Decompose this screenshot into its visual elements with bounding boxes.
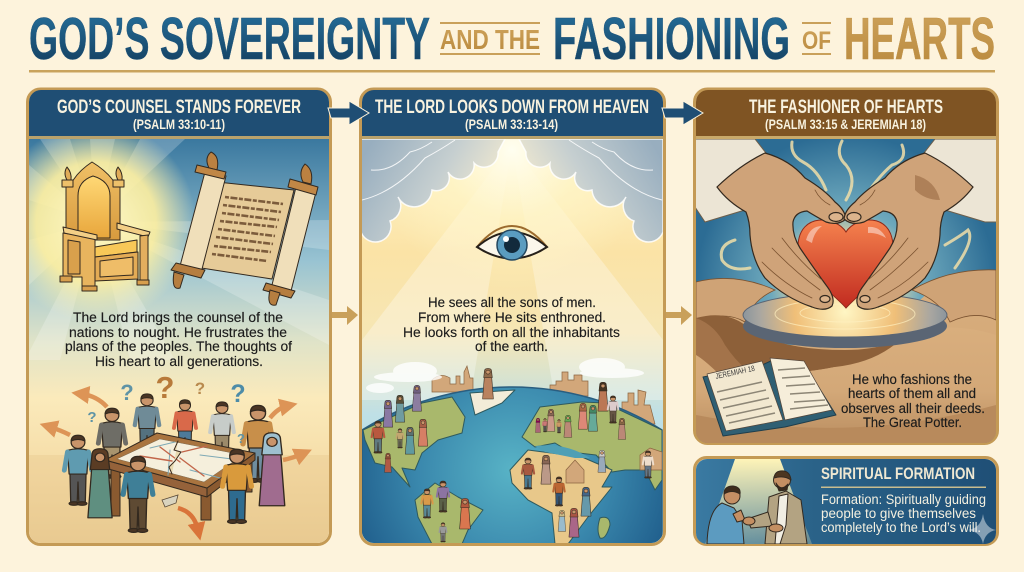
panel 4 heading: SPIRITUAL FORMATION (821, 464, 975, 483)
panel 2 text: He sees all the sons of men. (428, 295, 596, 310)
panel 2 text: He looks forth on all the inhabitants (403, 325, 620, 340)
light beam (705, 459, 812, 544)
arrow: gold arrow one (332, 306, 358, 325)
panel 1 text: nations to nought. He frustrates the (69, 325, 287, 340)
icon: golden throne (60, 162, 150, 291)
panel 4 text (821, 492, 986, 535)
skyline cities (432, 366, 655, 424)
kneeling figure praying (707, 486, 745, 544)
arrow: blue header arrow two (662, 101, 703, 125)
people of the earth (372, 368, 653, 542)
sleeves (695, 139, 997, 222)
back row of people (64, 394, 273, 505)
panel 1 text: His heart to all generations. (95, 354, 263, 369)
white clouds (366, 358, 644, 393)
panel 1 text: plans of the peoples. The thoughts of (65, 339, 292, 354)
scattered confused arrows (50, 394, 302, 530)
panel 1 header (29, 90, 329, 139)
globe (362, 387, 662, 544)
icon: potter's hands (717, 153, 973, 309)
panel 3 header: (PSALM 33:15 & JEREMIAH 18) (765, 116, 926, 132)
title: GOD’S SOVEREIGNTY (29, 6, 430, 72)
title (29, 6, 995, 72)
arrow: gold arrow two (666, 306, 692, 325)
panel 3 text: He who fashions the (852, 372, 972, 387)
panel 2 illustration (362, 139, 663, 543)
panel 1 text: The Lord brings the counsel of the (73, 310, 283, 325)
title: OF (802, 27, 831, 55)
panel: spiritual formation (694, 458, 998, 544)
panel 4 text: completely to the Lord’s will. (821, 520, 981, 535)
panel 1 header: (PSALM 33:10-11) (133, 116, 225, 132)
question marks: ? (156, 370, 174, 405)
question marks: ? (230, 380, 246, 408)
panel 3 text (841, 372, 985, 430)
panel 4 text: Formation: Spiritually guiding (821, 492, 986, 507)
title: AND THE (440, 24, 540, 55)
panel 1 header: GOD’S COUNSEL STANDS FOREVER (57, 97, 301, 118)
panel 2 header (362, 90, 663, 139)
icon: open Bible: JEREMIAH 18 (715, 364, 756, 381)
question marks: ? (195, 379, 205, 398)
clay swirl base (696, 270, 996, 444)
panel 3 text: observes all their deeds. (841, 401, 985, 416)
panel 1 illustration (29, 139, 329, 543)
panel 4 text: people to give themselves (821, 506, 976, 521)
question marks (88, 376, 244, 443)
panel 3 header (696, 90, 996, 139)
panel 2 text: From where He sits enthroned. (418, 310, 606, 325)
desert buildings (566, 448, 662, 483)
icon: scroll (171, 152, 318, 305)
panel 1 text (65, 310, 292, 369)
arrow: blue header arrow one (328, 101, 369, 125)
panel 3 text: The Great Potter. (863, 415, 962, 430)
panel 2 header: THE LORD LOOKS DOWN FROM HEAVEN (375, 97, 649, 118)
mentor figure (743, 471, 807, 544)
table with torn map (105, 433, 255, 520)
panel 3 header: THE FASHIONER OF HEARTS (749, 97, 943, 118)
panel 2 text (403, 295, 620, 354)
potter's wheel (743, 293, 947, 348)
question marks: ? (120, 380, 134, 405)
panel 2 header: (PSALM 33:13-14) (465, 116, 558, 132)
panel 3 illustration (695, 139, 997, 444)
title: FASHIONING (553, 6, 790, 72)
front row of people (88, 433, 285, 532)
panel 2 text: of the earth. (475, 339, 548, 354)
panel: God's counsel stands forever (0, 89, 330, 544)
icon: all-seeing eye (477, 226, 547, 260)
icon: open Bible (703, 358, 836, 436)
continents (363, 390, 662, 544)
panel: The fashioner of hearts (694, 89, 998, 444)
clouds (361, 139, 663, 242)
sparkle watermark (968, 514, 996, 544)
icon: clay heart (798, 220, 893, 308)
question marks: ? (237, 431, 245, 446)
fragment of torn map (162, 495, 178, 507)
panel 3 text: hearts of them all and (848, 386, 976, 401)
rising steam swirls (721, 141, 970, 269)
question marks: ? (87, 409, 97, 426)
panel: The Lord looks down from heaven (359, 88, 666, 546)
